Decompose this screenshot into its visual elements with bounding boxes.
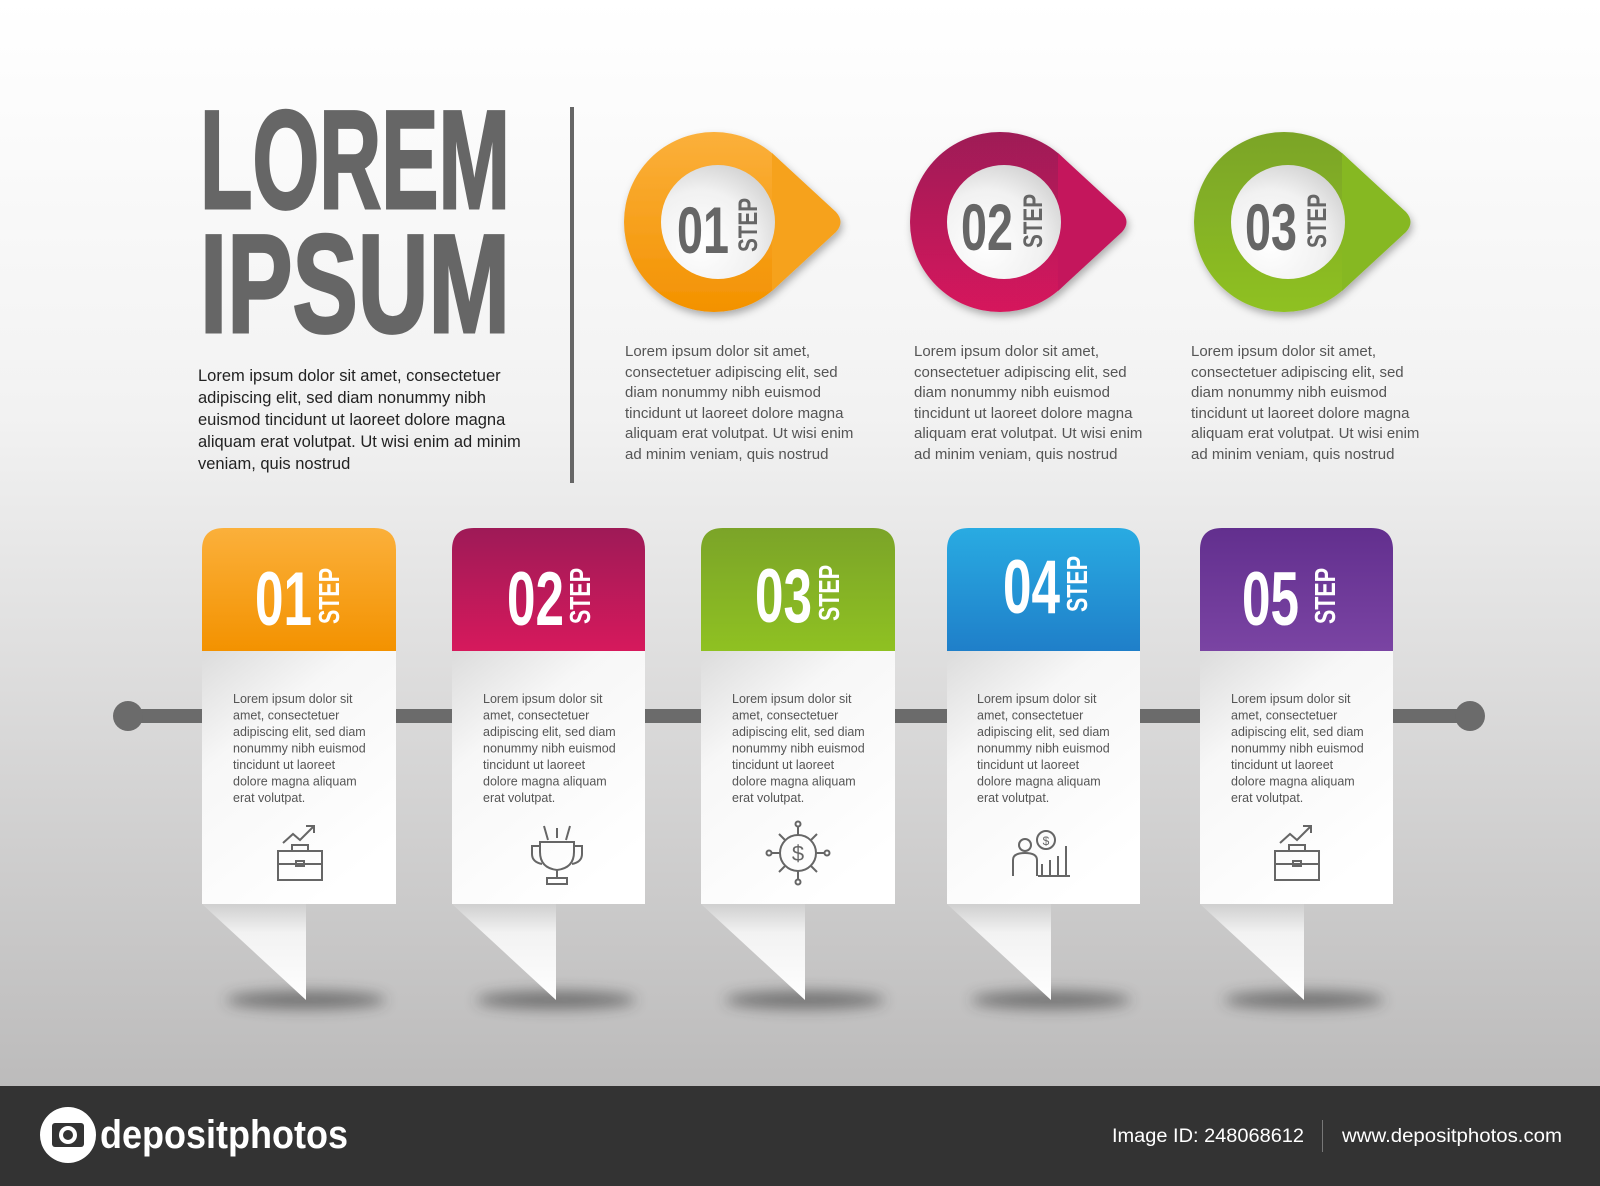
timeline line: [113, 701, 1485, 731]
card 01: adipiscing elit, sed diam: [233, 725, 366, 739]
card 03: nonummy nibh euismod: [732, 742, 865, 756]
circle texts: [625, 343, 1419, 463]
circle texts: consectetuer adipiscing elit, sed: [1191, 364, 1404, 381]
card 01: dolore magna aliquam: [233, 774, 357, 788]
card 02: [452, 528, 645, 1009]
circle texts: tincidunt ut laoreet dolore magna: [1191, 405, 1410, 422]
circle texts: diam nonummy nibh euismod: [914, 384, 1110, 401]
step circle 02: 02: [961, 190, 1013, 264]
card 04: STEP: [1062, 556, 1094, 612]
card 04: $: [1043, 834, 1050, 848]
card 03: erat volutpat.: [732, 791, 804, 805]
intro paragraph: euismod tincidunt ut laoreet dolore magna: [198, 411, 506, 429]
card 02: adipiscing elit, sed diam: [483, 725, 616, 739]
circle texts: diam nonummy nibh euismod: [1191, 384, 1387, 401]
circle texts: diam nonummy nibh euismod: [625, 384, 821, 401]
card 03: 03: [755, 554, 812, 639]
card 02: tincidunt ut laoreet: [483, 758, 586, 772]
card 05: [1200, 528, 1393, 1009]
card 02: nonummy nibh euismod: [483, 742, 616, 756]
step circle 03: 03: [1245, 190, 1297, 264]
circle texts: Lorem ipsum dolor sit amet,: [1191, 343, 1376, 360]
card 04: 04: [1003, 545, 1060, 630]
step circle 01: 01: [677, 193, 729, 267]
card 04: nonummy nibh euismod: [977, 742, 1110, 756]
card 03: [701, 528, 895, 1009]
card 05: 05: [1242, 557, 1299, 642]
card 05: nonummy nibh euismod: [1231, 742, 1364, 756]
card 03: dolore magna aliquam: [732, 774, 856, 788]
logo: [40, 1107, 348, 1163]
card 02: Lorem ipsum dolor sit: [483, 692, 603, 706]
icon: dollar network: [766, 822, 830, 884]
card 04: dolore magna aliquam: [977, 774, 1101, 788]
footer info: Image ID: 248068612: [1112, 1126, 1304, 1147]
card 01: nonummy nibh euismod: [233, 742, 366, 756]
intro paragraph: veniam, quis nostrud: [198, 455, 350, 473]
step circle 03: STEP: [1302, 194, 1332, 248]
card 01: 01: [255, 557, 312, 642]
card 03: amet, consectetuer: [732, 708, 838, 722]
circle texts: aliquam erat volutpat. Ut wisi enim: [625, 425, 853, 442]
card 05: dolore magna aliquam: [1231, 774, 1355, 788]
circle texts: ad minim veniam, quis nostrud: [625, 446, 828, 463]
card 05: tincidunt ut laoreet: [1231, 758, 1334, 772]
intro paragraph: [198, 367, 521, 473]
card 05: Lorem ipsum dolor sit: [1231, 692, 1351, 706]
icon: trophy: [532, 826, 582, 884]
icon: briefcase growth: [1275, 826, 1319, 880]
circle texts: tincidunt ut laoreet dolore magna: [914, 405, 1133, 422]
step circle 01: STEP: [733, 198, 763, 252]
card 01: erat volutpat.: [233, 791, 305, 805]
step circle 01: [624, 132, 840, 312]
logo: depositphotos: [100, 1113, 348, 1157]
circle texts: Lorem ipsum dolor sit amet,: [914, 343, 1099, 360]
card 01: [202, 528, 396, 1009]
card 03: tincidunt ut laoreet: [732, 758, 835, 772]
card 02: amet, consectetuer: [483, 708, 589, 722]
step circle 02: STEP: [1018, 194, 1048, 248]
card 03: $: [792, 841, 804, 866]
intro paragraph: adipiscing elit, sed diam nonummy nibh: [198, 389, 486, 407]
card 03: STEP: [814, 565, 846, 621]
icon: person with chart: [1013, 831, 1070, 876]
title: [200, 81, 510, 362]
card 05: erat volutpat.: [1231, 791, 1303, 805]
card 02: erat volutpat.: [483, 791, 555, 805]
circle texts: consectetuer adipiscing elit, sed: [914, 364, 1127, 381]
footer info: [1112, 1120, 1562, 1152]
circle texts: consectetuer adipiscing elit, sed: [625, 364, 838, 381]
title: LOREM: [200, 81, 510, 238]
card 01: tincidunt ut laoreet: [233, 758, 336, 772]
footer info: www.depositphotos.com: [1341, 1126, 1562, 1147]
intro paragraph: aliquam erat volutpat. Ut wisi enim ad minim: [198, 433, 521, 451]
card 02: STEP: [565, 568, 597, 624]
step circle 03: [1194, 132, 1410, 312]
circle texts: Lorem ipsum dolor sit amet,: [625, 343, 810, 360]
card 04: Lorem ipsum dolor sit: [977, 692, 1097, 706]
circle texts: aliquam erat volutpat. Ut wisi enim: [914, 425, 1142, 442]
intro paragraph: Lorem ipsum dolor sit amet, consectetuer: [198, 367, 501, 385]
circle texts: ad minim veniam, quis nostrud: [1191, 446, 1394, 463]
card 01: amet, consectetuer: [233, 708, 339, 722]
card 01: Lorem ipsum dolor sit: [233, 692, 353, 706]
card 04: adipiscing elit, sed diam: [977, 725, 1110, 739]
footer: [0, 1086, 1600, 1186]
circle texts: aliquam erat volutpat. Ut wisi enim: [1191, 425, 1419, 442]
title: IPSUM: [200, 205, 510, 362]
card 05: adipiscing elit, sed diam: [1231, 725, 1364, 739]
card 04: amet, consectetuer: [977, 708, 1083, 722]
card 04: erat volutpat.: [977, 791, 1049, 805]
circle texts: tincidunt ut laoreet dolore magna: [625, 405, 844, 422]
card 05: amet, consectetuer: [1231, 708, 1337, 722]
circle texts: ad minim veniam, quis nostrud: [914, 446, 1117, 463]
card 03: Lorem ipsum dolor sit: [732, 692, 852, 706]
card 02: dolore magna aliquam: [483, 774, 607, 788]
card 01: STEP: [314, 568, 346, 624]
card 03: adipiscing elit, sed diam: [732, 725, 865, 739]
card 02: 02: [507, 557, 564, 642]
step circle 02: [910, 132, 1126, 312]
card 05: STEP: [1310, 568, 1342, 624]
card 04: [947, 528, 1140, 1009]
icon: briefcase growth: [278, 826, 322, 880]
card 04: tincidunt ut laoreet: [977, 758, 1080, 772]
